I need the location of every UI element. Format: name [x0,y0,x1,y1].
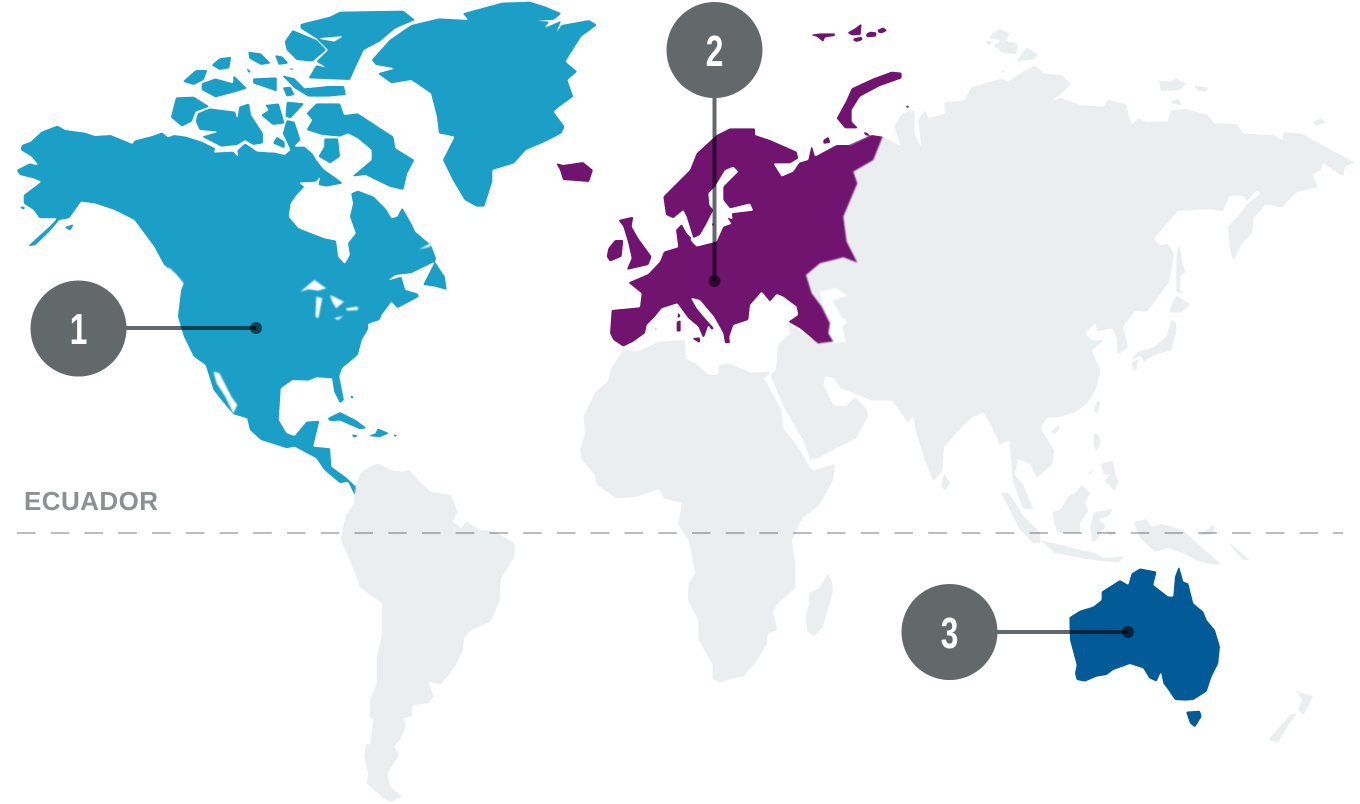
Tasmania [1186,711,1202,727]
Newfoundland and Caribbean islands [19,207,447,438]
North American mainland [17,126,436,495]
callout 2: Europe [666,2,762,287]
islands: Java, New Guinea, Oceania, New Zealand (grey) [1040,519,1313,743]
region: Asia and Middle East (grey) [770,29,1355,543]
region 2: Europe (purple) [607,23,910,347]
European mainland [610,128,883,347]
British Isles [607,217,652,270]
region 1: North America and Greenland (blue) [17,2,597,495]
callout 3: Australia [902,584,1134,680]
callout 1: North America: 1 [70,305,87,354]
region: Africa (grey) [580,340,835,683]
islands: Russian Arctic [985,29,1327,126]
island: Madagascar [806,573,833,636]
Svalbard and Arctic islands [809,23,910,144]
Mediterranean and Baltic islands [654,217,733,343]
equator label: ECUADOR [24,486,158,516]
region 3: Australia (dark blue) [1069,566,1220,727]
equator dashed line [17,532,1343,534]
islands: Japan, Sakhalin, Taiwan, Sri Lanka [941,244,1190,491]
region: South America (grey) [341,463,515,802]
callout 3: Australia: 3 [941,609,958,658]
white water details on the mainland [164,243,431,413]
Greenland [372,2,597,207]
callout 1: North America [30,280,262,376]
islands: Southeast Asia [1001,433,1119,543]
sea: Caspian [820,288,848,344]
callout 2: Europe: 2 [706,27,723,76]
island: Iceland [556,162,593,182]
Arctic archipelago [171,11,415,190]
Australian mainland [1069,566,1220,701]
